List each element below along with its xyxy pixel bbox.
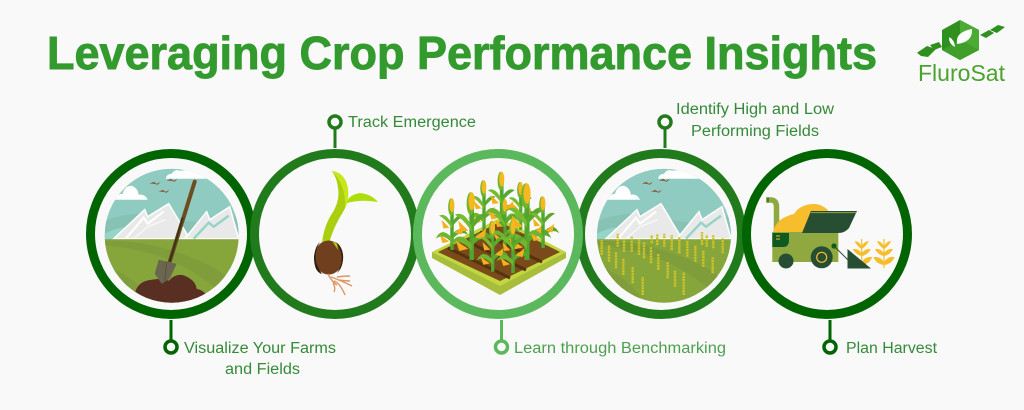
icon: shovel in soil landscape	[105, 169, 239, 306]
label: Learn through Benchmarking: Learn through Benchmarking	[514, 340, 726, 357]
ring: step 1	[90, 154, 252, 314]
ring: step 3	[418, 154, 578, 314]
logo wordmark: FluroSat	[918, 60, 1005, 86]
ring: step 2	[254, 154, 416, 314]
icon: sprouting seed	[314, 171, 378, 295]
connector and node: step 4	[659, 116, 671, 148]
label: Identify High and Low Performing Fields: Identify High and Low	[676, 101, 835, 118]
icon: combine harvester	[766, 198, 894, 268]
ring: step 4	[580, 154, 742, 314]
label: Identify High and Low Performing Fields: Performing Fields	[691, 123, 819, 140]
icon: wheat landscape	[597, 169, 731, 306]
label: Plan Harvest: Plan Harvest	[846, 340, 938, 357]
label: Visualize Your Farms and Fields: and Fields	[225, 361, 300, 378]
icon: corn field plot	[432, 172, 566, 295]
label: Visualize Your Farms and Fields	[184, 340, 336, 378]
connector and node: step 5	[824, 320, 836, 353]
label: Identify High and Low Performing Fields	[676, 101, 835, 140]
ring: step 5	[746, 154, 908, 314]
label: Visualize Your Farms and Fields: Visualize Your Farms	[184, 340, 336, 357]
label: Track Emergence: Track Emergence	[348, 114, 476, 131]
logo: FluroSat	[917, 20, 1005, 86]
title: Leveraging Crop Performance Insights	[47, 27, 877, 79]
connector and node: step 3	[496, 320, 508, 353]
connector and node: step 1	[165, 320, 177, 353]
connector and node: step 2	[329, 116, 341, 148]
